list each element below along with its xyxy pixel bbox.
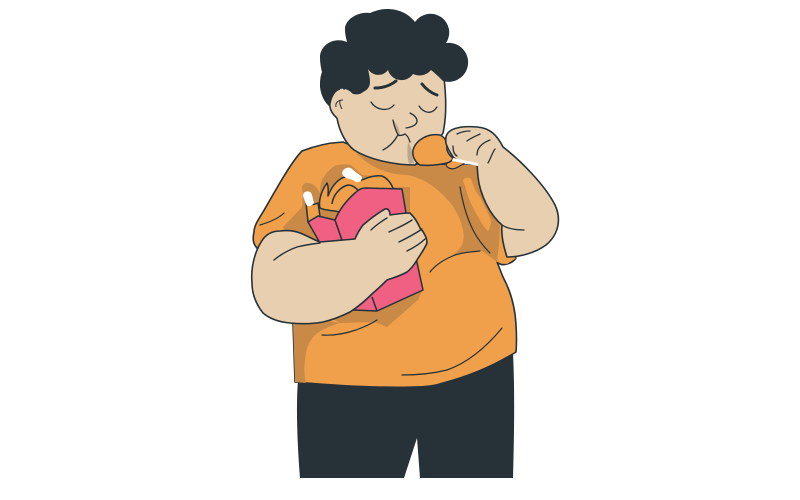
box front [320,188,423,311]
food box [303,168,423,311]
arm and finger creases [274,218,425,260]
pants [297,352,514,478]
left arm and hand [252,209,427,324]
bone top [342,168,362,182]
shirt shadow: under neck and chest [355,152,503,262]
cheek lines, nose, mouth [371,102,437,150]
cheek shadow [393,120,414,164]
shirt shadow: around box [283,164,423,327]
right arm and hand [446,127,558,257]
ear [330,89,353,118]
bone left [303,191,314,206]
shirt highlight: inner sleeve [463,178,491,231]
shirt shadow: left belly [293,315,340,383]
fried chicken pieces [319,176,393,215]
shirt [253,142,517,387]
head [320,9,468,165]
eyes [375,81,437,95]
chicken drumstick left [306,203,320,222]
shirt crease lines [260,187,502,375]
box left panel [308,216,342,243]
bone in fist [452,158,478,166]
shirt highlight: sleeve cuff [497,225,516,264]
chicken drumstick in hand [413,135,465,169]
hair [320,9,468,107]
face [337,60,446,165]
